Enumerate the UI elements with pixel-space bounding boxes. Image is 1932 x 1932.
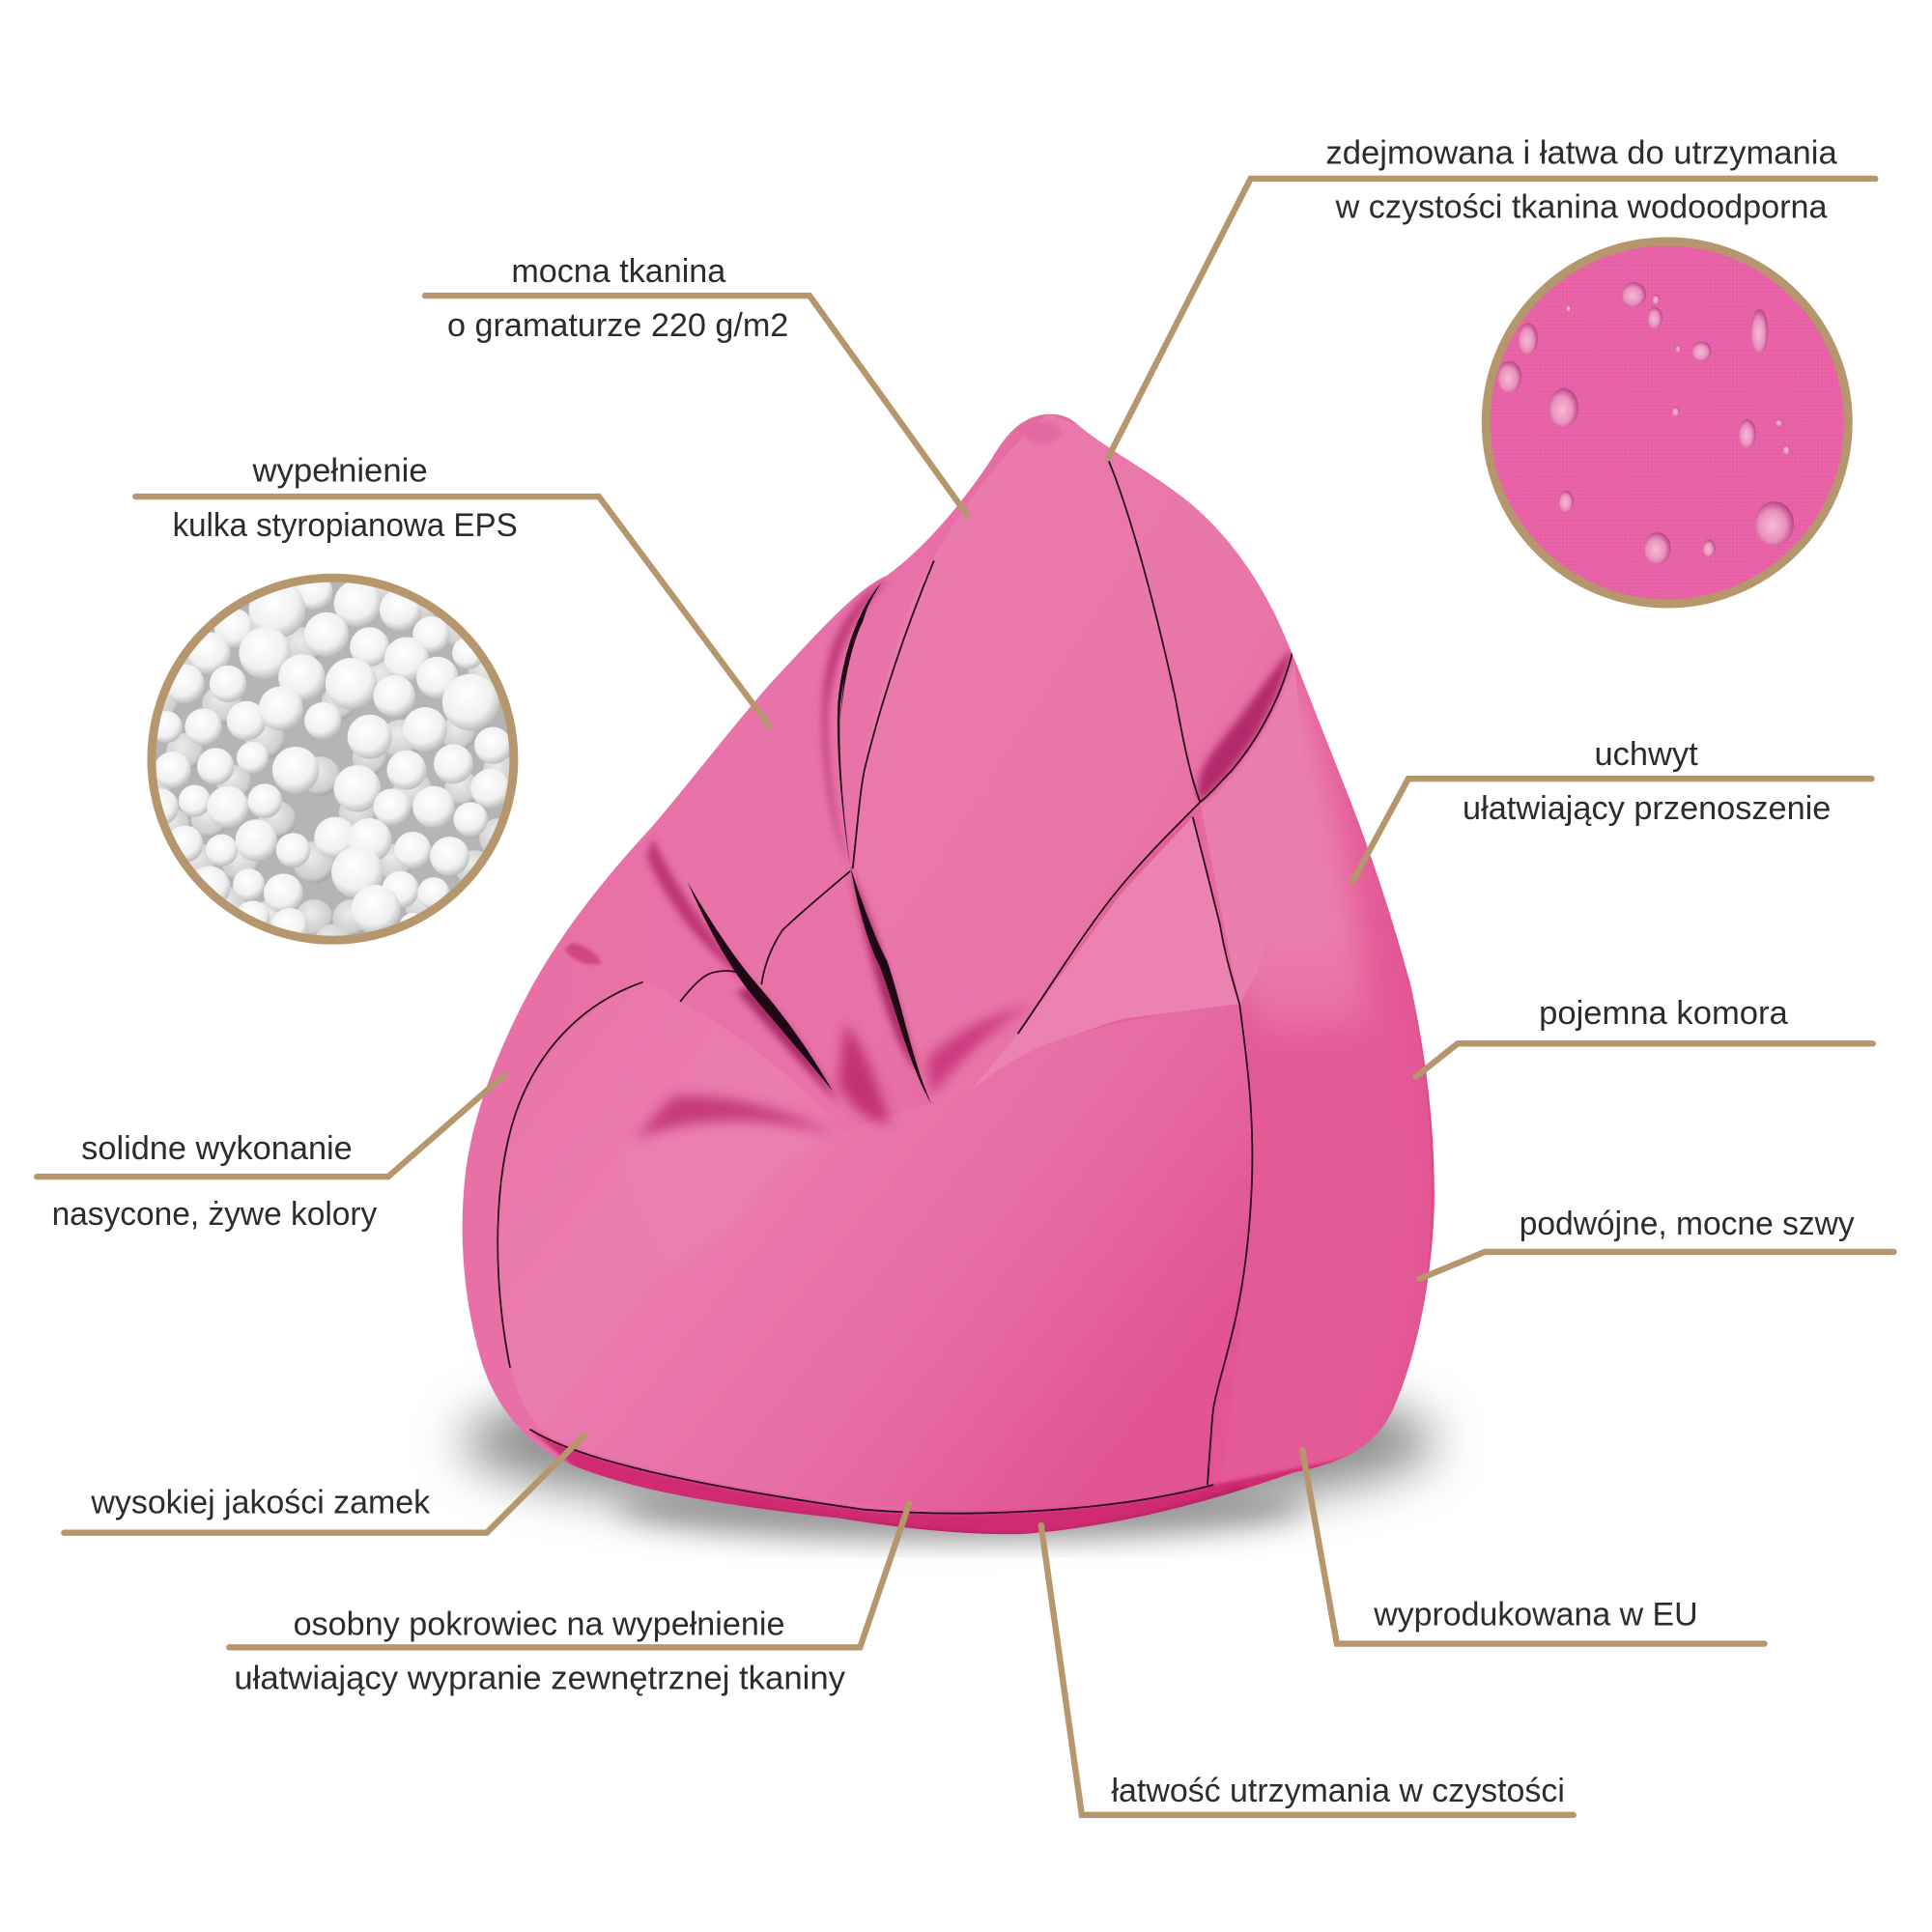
bottom dark band: [529, 1430, 1368, 1540]
callout: uchwyt: uchwyt: [1595, 736, 1698, 773]
callout: mocna tkanina: [425, 253, 967, 515]
callout: uchwyt: [1353, 736, 1872, 881]
circle: waterproof fabric with droplets: [1479, 234, 1861, 616]
callout: solidne wykonanie: nasycone, żywe kolory: [52, 1196, 378, 1233]
callout: zdejmowana tkanina: w czystości tkanina wodoodporna: [1335, 189, 1828, 226]
callout: pokrowiec: [229, 1503, 909, 1697]
callout: pokrowiec: osobny pokrowiec na wypełnienie: [294, 1606, 784, 1643]
callout: solidne wykonanie: [37, 1074, 505, 1233]
callout: mocna tkanina: o gramaturze 220 g/m2: [447, 307, 788, 344]
callout: uchwyt: ułatwiający przenoszenie: [1463, 790, 1831, 827]
callout: wyprodukowana w EU: wyprodukowana w EU: [1373, 1596, 1698, 1633]
callout: solidne wykonanie: solidne wykonanie: [81, 1130, 353, 1167]
left upper lobe: [757, 686, 769, 697]
right lower panel: [1269, 655, 1432, 1481]
callout: pojemna komora: [1416, 995, 1873, 1077]
callout: zdejmowana tkanina: zdejmowana i łatwa do utrzymania: [1325, 135, 1838, 172]
callout: zamek: wysokiej jakości zamek: [90, 1484, 431, 1520]
top handle hole: [1024, 421, 1061, 443]
dark creases: [688, 582, 931, 1104]
right edge shade: [1412, 996, 1435, 1308]
beanbag: [443, 394, 1466, 1552]
central leaf panel: [898, 413, 1293, 1103]
seams: [497, 458, 1293, 1513]
callout: wypełnienie: wypełnienie: [251, 453, 428, 490]
front bulge: [497, 982, 1252, 1513]
callout: wyprodukowana w EU: [1302, 1450, 1765, 1644]
callout: pojemna komora: pojemna komora: [1539, 995, 1789, 1032]
callout: podwójne szwy: [1419, 1206, 1893, 1279]
callout: podwójne szwy: podwójne, mocne szwy: [1520, 1206, 1855, 1242]
callout: łatwość utrzymania: łatwość utrzymania w czystości: [1112, 1773, 1565, 1809]
callout: zdejmowana tkanina: [1108, 135, 1875, 458]
callout: mocna tkanina: mocna tkanina: [511, 253, 726, 290]
fabric shadows: [564, 579, 1293, 1140]
right upper wedge: [1200, 653, 1368, 1035]
callout: wypełnienie: kulka styropianowa EPS: [173, 507, 518, 544]
callout: pokrowiec: ułatwiający wypranie zewnętrznej tkaniny: [234, 1661, 846, 1697]
callout: łatwość utrzymania: [1041, 1525, 1574, 1815]
callout: zamek: [64, 1435, 584, 1533]
floor shadow: [462, 1368, 1435, 1538]
circle: EPS foam beads: [137, 567, 519, 961]
callout: wypełnienie: [135, 453, 770, 727]
